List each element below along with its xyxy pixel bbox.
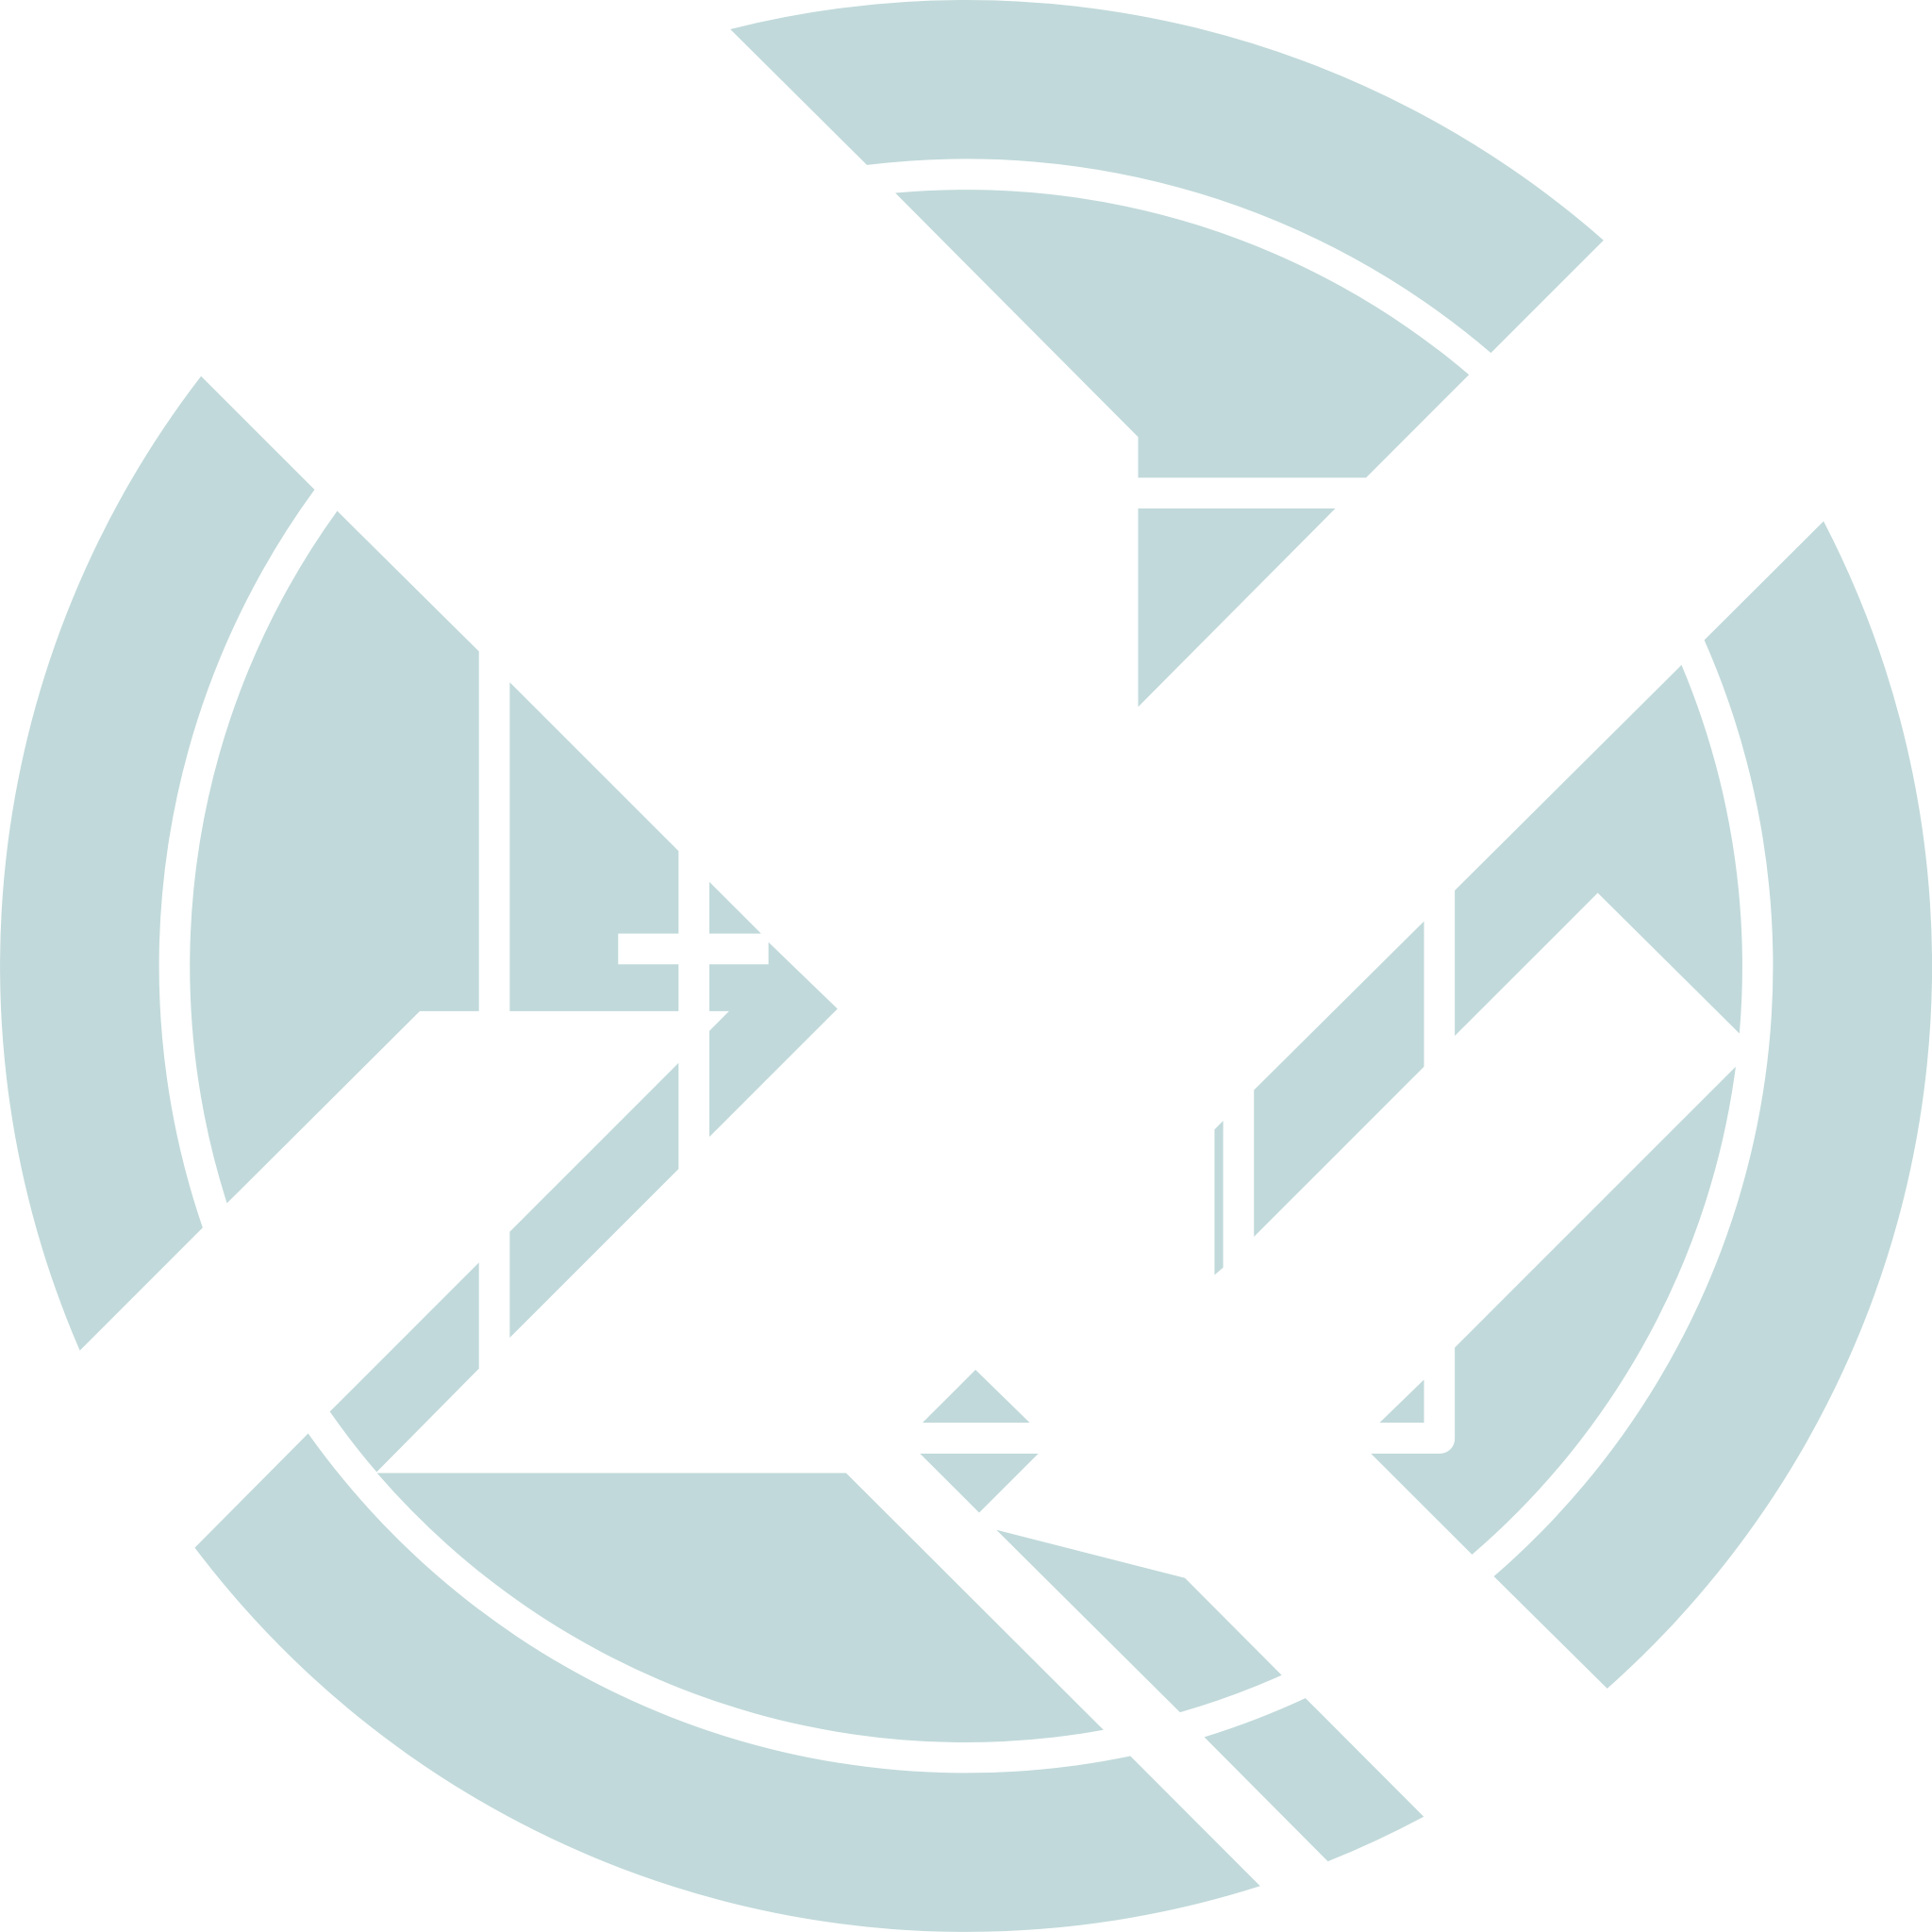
inner ring segment: bottom bbox=[377, 1473, 1104, 1742]
arrow point: cross lower right bbox=[709, 942, 838, 1137]
inner ring segment: left bbox=[190, 511, 479, 1203]
outer ring fragment: lower centre right bbox=[1205, 1698, 1424, 1861]
outer ring segment: right bbox=[1494, 521, 1932, 1689]
thin sliver: right of centre bbox=[1214, 1121, 1224, 1274]
triangle: upper centre bbox=[1138, 508, 1335, 707]
stripe: left of cross, lower bbox=[509, 1063, 678, 1338]
triangle: cross upper right bbox=[709, 882, 761, 934]
triangle: centre bottom upper bbox=[923, 1370, 1030, 1423]
stripe: right of centre bbox=[1254, 922, 1424, 1237]
stripe: lower left bbox=[330, 1262, 479, 1472]
outer ring segment: left bbox=[0, 376, 314, 1351]
inner ring segment: top bbox=[895, 190, 1469, 477]
inner ring segment: upper right chevron bbox=[1455, 665, 1742, 1036]
small triangle: lower right bbox=[1379, 1379, 1424, 1423]
outer ring segment: bottom bbox=[194, 1434, 1260, 1932]
inner ring segment: lower right bbox=[1371, 1067, 1736, 1555]
triangle: centre bottom lower bbox=[920, 1454, 1039, 1513]
outer ring segment: top bbox=[730, 0, 1604, 353]
inner ring fragment: lower centre right bbox=[996, 1530, 1282, 1712]
block: left of cross, upper bbox=[509, 682, 678, 1011]
